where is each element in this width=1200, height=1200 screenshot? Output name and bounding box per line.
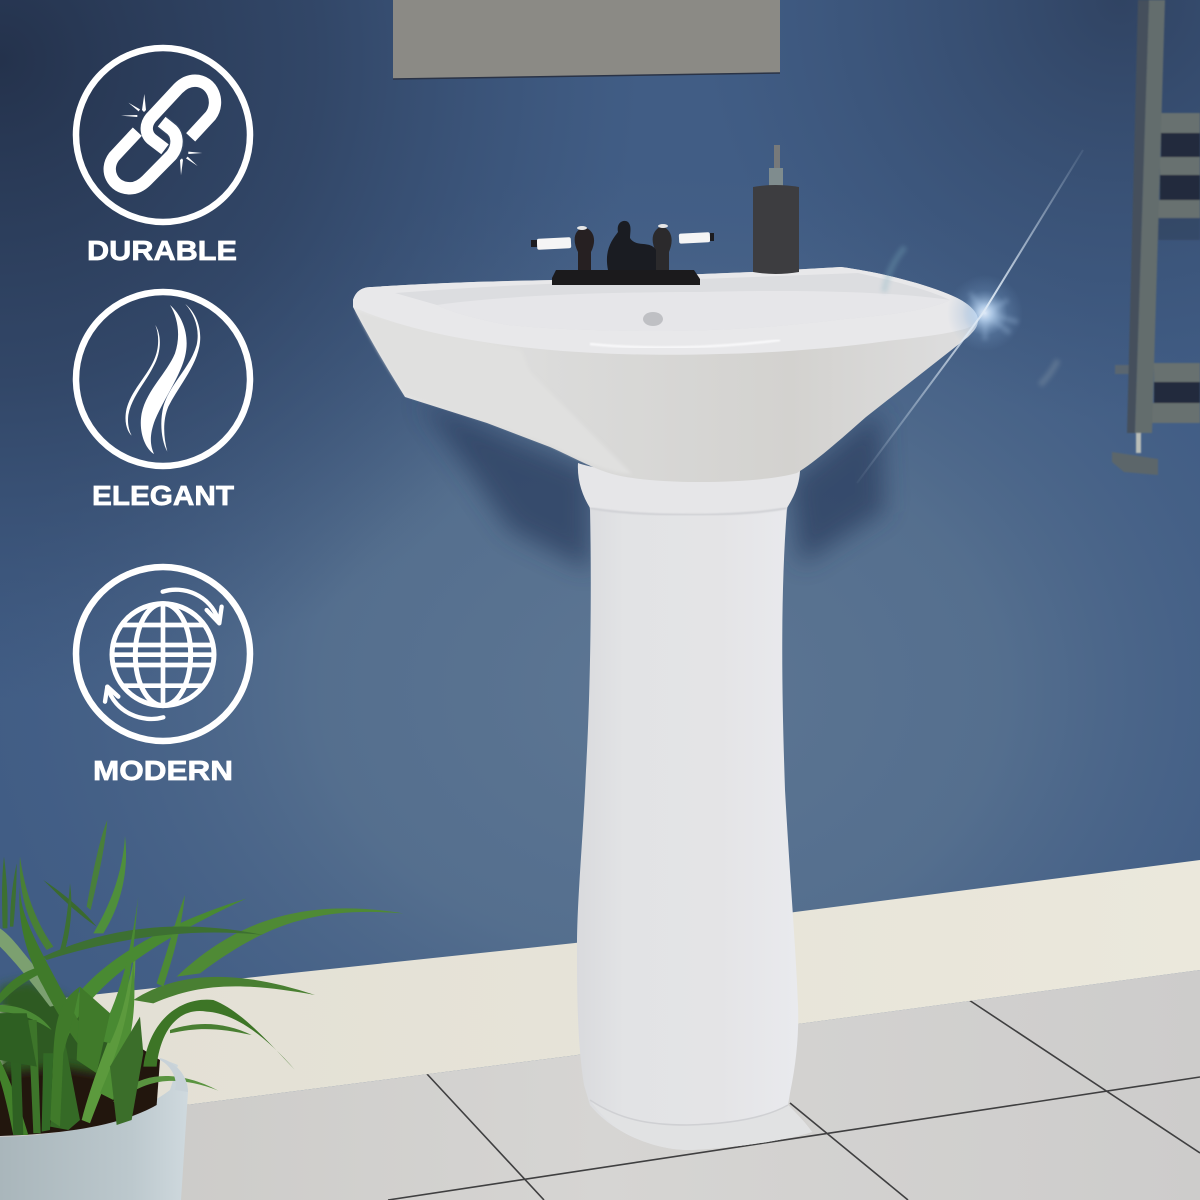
floor tiles xyxy=(0,970,1200,1200)
sink lower body xyxy=(353,267,978,482)
pot rim xyxy=(160,1058,188,1092)
wall shadows under sink xyxy=(420,400,885,570)
feature: durable xyxy=(76,48,250,266)
pedestal column xyxy=(577,463,812,1150)
pedestal collar xyxy=(578,463,800,515)
pot xyxy=(0,1058,188,1200)
towel rail xyxy=(1112,0,1200,475)
baseboard xyxy=(0,860,1200,1125)
mirror xyxy=(393,0,780,79)
sink facet xyxy=(356,310,632,474)
sparkle xyxy=(857,150,1083,483)
soap dispenser xyxy=(753,145,799,274)
icon: chain link xyxy=(76,48,250,222)
faucet handles xyxy=(537,237,571,250)
plant in pot xyxy=(0,820,403,1200)
overflow drain xyxy=(643,312,663,326)
icon: waves xyxy=(76,292,250,466)
sink rim xyxy=(353,267,978,355)
feature: elegant xyxy=(76,292,250,511)
label: elegant: ELEGANT xyxy=(92,480,234,511)
feature: modern xyxy=(76,567,250,786)
leaves xyxy=(0,820,403,1136)
faucet xyxy=(531,221,714,285)
icon: globe with arrows xyxy=(76,567,250,741)
sink basin xyxy=(353,267,978,482)
label: durable: DURABLE xyxy=(87,235,237,266)
sink bowl interior xyxy=(395,273,950,331)
icon: sparks xyxy=(121,94,202,175)
label: modern: MODERN xyxy=(93,755,233,786)
